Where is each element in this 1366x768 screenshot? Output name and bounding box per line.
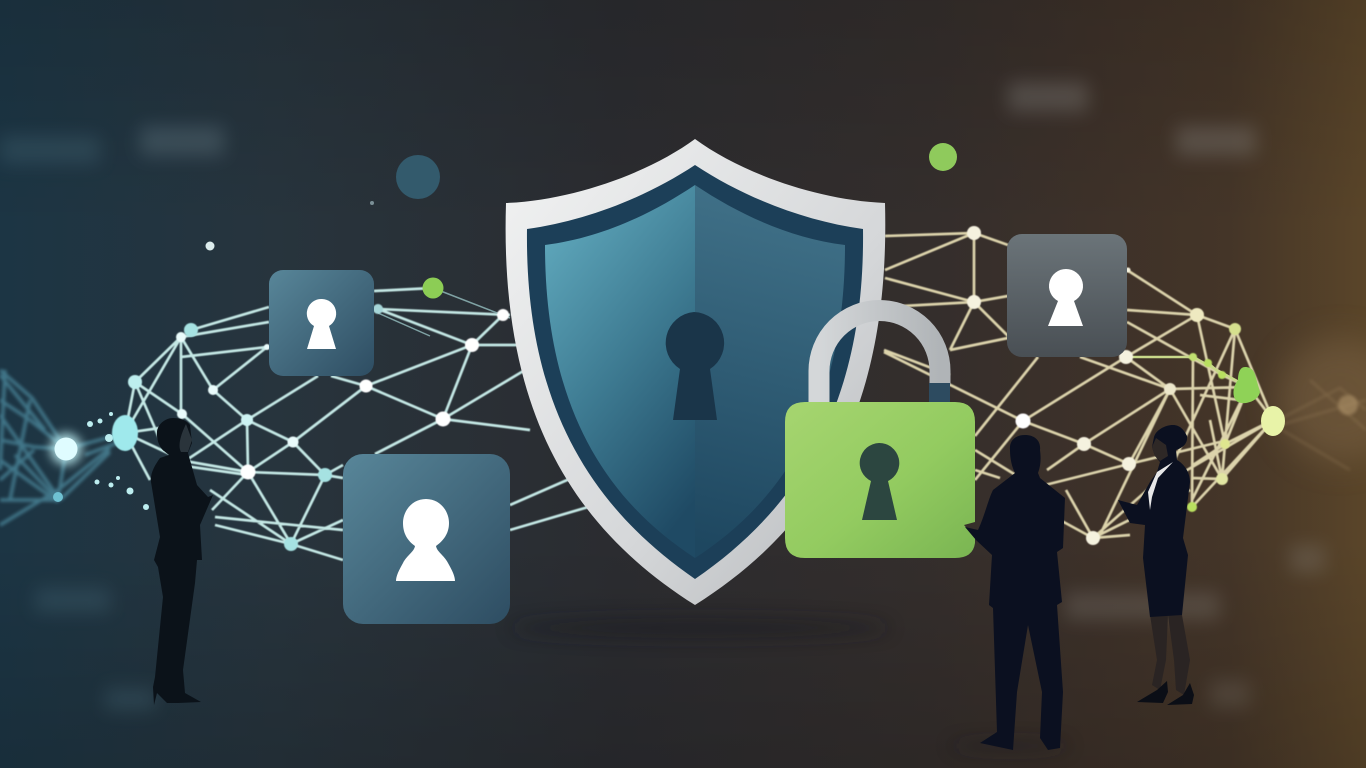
padlock body (785, 402, 975, 558)
icon: small keyhole tile (269, 270, 374, 376)
right network (884, 226, 1285, 545)
silhouette: man in centre-right (965, 435, 1065, 750)
padlock keyhole (860, 443, 899, 520)
network nodes (112, 304, 509, 551)
scattered particles (53, 412, 149, 510)
bright end node (1261, 406, 1285, 436)
white shirt (1148, 462, 1173, 510)
shield keyhole (666, 312, 724, 420)
silhouette: woman on left (151, 418, 213, 705)
decorative dots (206, 143, 957, 250)
icon: grey keyhole tile (1007, 234, 1127, 357)
glow node (50, 433, 82, 465)
green cluster node (1233, 367, 1260, 403)
far-left glowing mesh (0, 370, 149, 525)
shoes (1137, 681, 1194, 705)
shield right face (695, 185, 845, 558)
icon: large shield (506, 139, 885, 605)
blurred background panels (0, 82, 1325, 710)
icon: green padlock (785, 310, 975, 558)
body (1118, 425, 1190, 617)
padlock shackle (819, 310, 940, 404)
far-right blurred mesh (1278, 338, 1366, 470)
shield left face (545, 185, 695, 558)
left network (112, 278, 595, 560)
ground shadow: man (950, 741, 1070, 751)
silhouette: woman on right (1118, 425, 1194, 705)
ground shadow: shield (510, 618, 890, 638)
icon: large user tile (343, 454, 510, 624)
shield rim (506, 139, 885, 605)
face (180, 424, 192, 452)
network nodes (967, 226, 1241, 545)
green node (422, 278, 444, 298)
face (1152, 438, 1168, 461)
legs (1150, 615, 1190, 695)
shield navy border (527, 165, 863, 579)
